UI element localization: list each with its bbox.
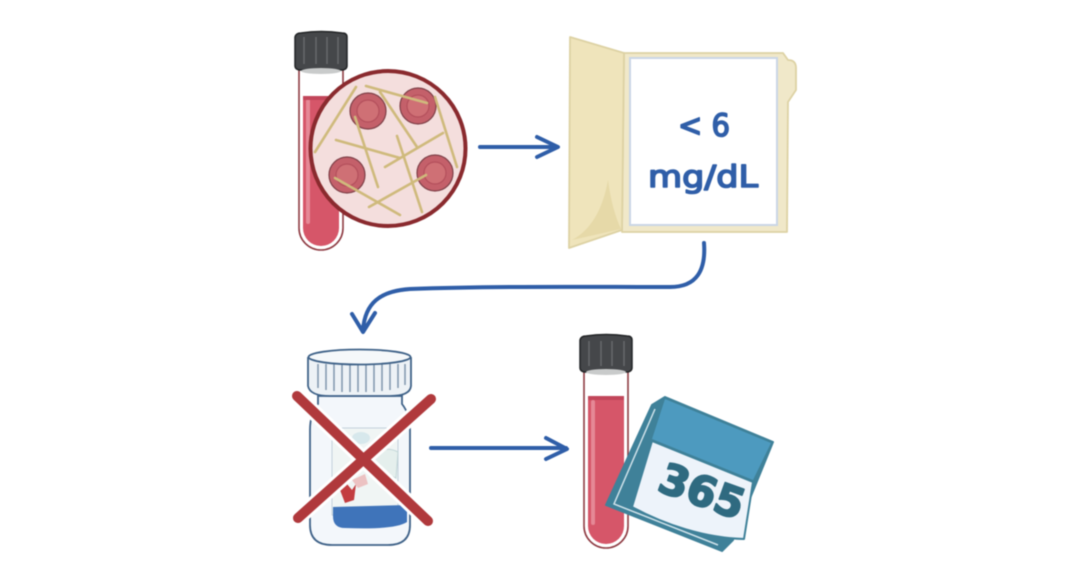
result sheet bbox=[630, 58, 777, 225]
icon: crossed-out medicine bottle bbox=[297, 350, 431, 545]
calendar number: 365 bbox=[652, 453, 752, 529]
folder body bbox=[622, 53, 796, 232]
bottle label bbox=[332, 428, 407, 528]
icon: calendar showing 365 bbox=[606, 397, 773, 551]
icon: blood test tube with magnified crystals bbox=[295, 32, 466, 250]
result text: < 6 bbox=[678, 108, 730, 144]
bottle body bbox=[310, 396, 410, 545]
crystals bbox=[315, 86, 457, 215]
result text bbox=[648, 108, 758, 195]
icon: blood test tube bbox=[580, 334, 632, 548]
red blood cells bbox=[329, 88, 453, 193]
back pages bbox=[606, 397, 773, 551]
arrow: result to stopping medication bbox=[352, 243, 704, 332]
calendar header bbox=[652, 399, 771, 480]
icon: open folder with result bbox=[569, 37, 796, 248]
bottle cap bbox=[308, 350, 411, 396]
blood tube bbox=[295, 32, 347, 250]
arrow: test to result bbox=[480, 137, 558, 157]
calendar page bbox=[632, 441, 753, 539]
result text: mg/dL bbox=[648, 160, 758, 195]
arrow: medication to yearly test bbox=[431, 438, 567, 459]
magnified circle bbox=[310, 71, 466, 226]
red cross bbox=[297, 396, 431, 521]
folder flap bbox=[569, 37, 624, 248]
